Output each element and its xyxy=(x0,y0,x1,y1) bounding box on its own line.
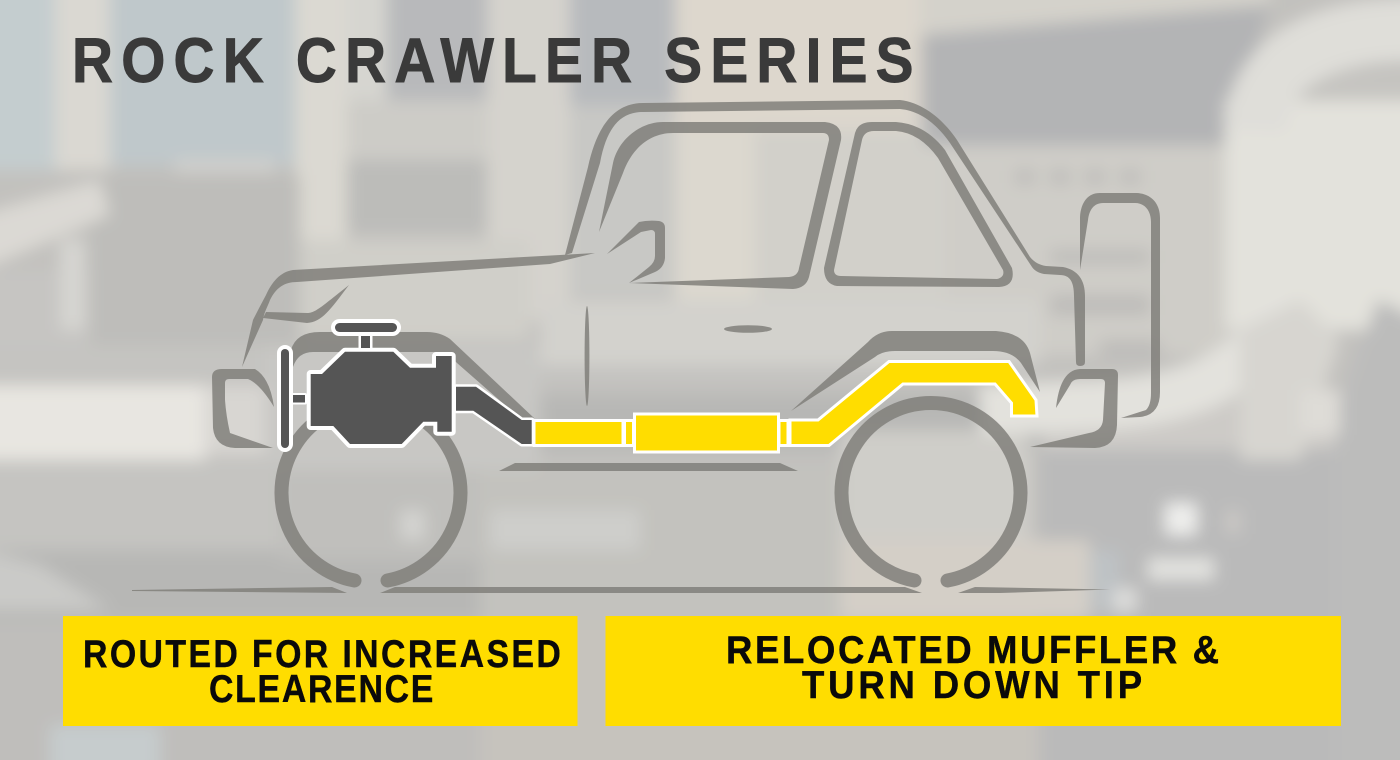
A-pillar mirror xyxy=(607,221,665,283)
rear wheel arch xyxy=(791,331,1040,411)
callout: left clearance xyxy=(63,616,578,726)
door seam xyxy=(585,306,589,406)
underbody line xyxy=(499,463,798,471)
crank stub xyxy=(293,395,305,402)
roof and rear body line xyxy=(565,100,1085,366)
front bumper xyxy=(212,369,274,448)
muffler xyxy=(634,414,778,452)
callout: left clearance: ROUTED FOR INCREASED xyxy=(83,632,561,675)
neck xyxy=(361,335,370,348)
front connector xyxy=(624,420,634,446)
callout: right muffler xyxy=(606,616,1341,726)
engine block xyxy=(311,352,452,444)
callout: left clearance: CLEARENCE xyxy=(209,667,433,710)
windshield xyxy=(599,122,841,289)
callout: right muffler: RELOCATED MUFFLER & xyxy=(726,628,1219,671)
callout: right muffler: TURN DOWN TIP xyxy=(802,663,1142,706)
engine xyxy=(281,323,532,448)
air cleaner cap xyxy=(335,323,397,332)
vehicle outline xyxy=(132,100,1160,593)
door handle xyxy=(724,325,772,333)
exhaust system in yellow xyxy=(534,362,1037,452)
title: ROCK CRAWLER SERIES xyxy=(72,25,914,96)
rear connector xyxy=(779,420,788,446)
front wheel xyxy=(281,403,460,580)
header pipe xyxy=(456,387,532,444)
side window xyxy=(824,122,1013,287)
hood crease xyxy=(263,285,349,323)
rear wheel xyxy=(842,403,1020,580)
front pipe section xyxy=(534,420,623,446)
flywheel xyxy=(281,349,289,448)
hood xyxy=(242,253,595,367)
tailpipe with turn down tip xyxy=(790,362,1037,446)
ground shadows xyxy=(132,587,1110,593)
front wheel arch xyxy=(291,332,534,420)
rear spare carrier xyxy=(1080,193,1160,418)
rear bumper xyxy=(1030,369,1118,448)
